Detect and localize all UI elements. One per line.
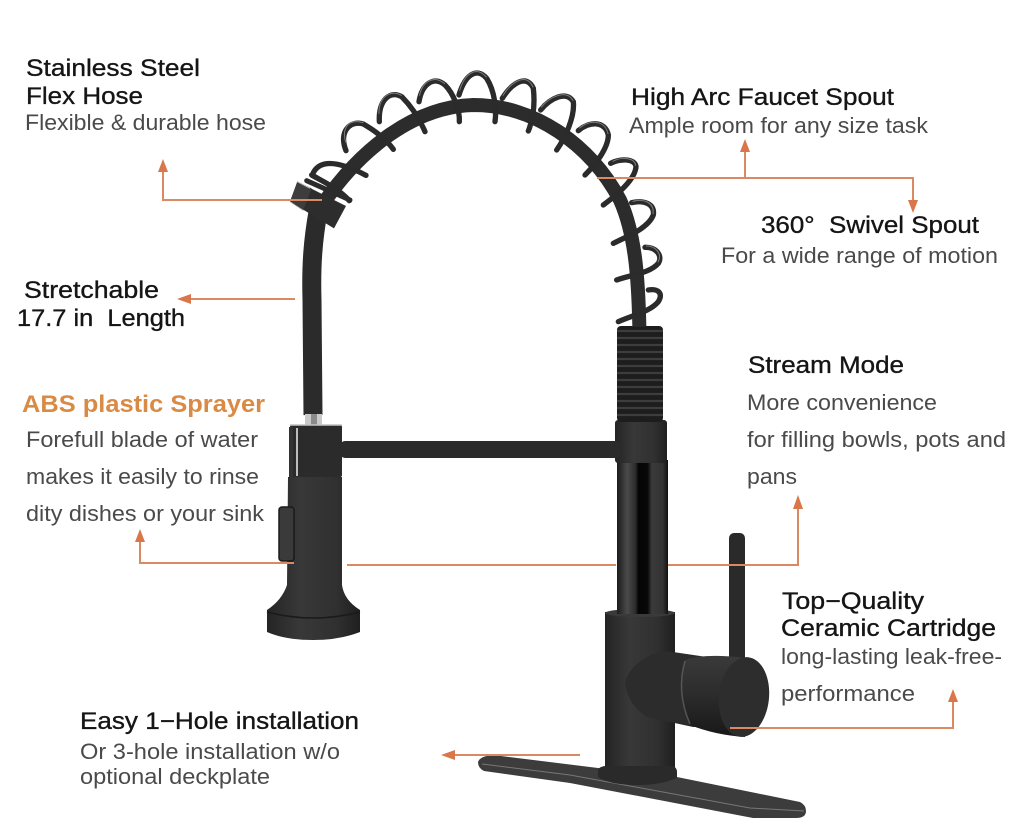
faucet illustration <box>267 72 806 818</box>
arrow: sprayer <box>135 529 294 563</box>
callout: stream mode: pans <box>747 464 797 489</box>
arrow: ceramic cartridge <box>730 689 958 728</box>
callout: easy installation <box>80 708 359 789</box>
callout: high arc faucet spout: High Arc Faucet Spout <box>631 84 894 111</box>
callout: stream mode: Stream Mode <box>748 352 904 379</box>
callout: stream mode: More convenience <box>747 390 937 415</box>
callout: ABS plastic sprayer: ABS plastic Sprayer <box>22 391 265 418</box>
callout: ABS plastic sprayer: makes it easily to rinse <box>26 464 259 489</box>
sprayer button <box>279 507 294 561</box>
arrow: flex hose <box>158 159 322 200</box>
callout: easy installation: Easy 1−Hole installation <box>80 708 359 735</box>
callout: swivel spout: 360° Swivel Spout <box>761 212 979 239</box>
deck plate <box>478 755 806 818</box>
callout: high arc faucet spout <box>629 84 929 138</box>
callout: stainless steel flex hose: Flex Hose <box>26 83 143 110</box>
callout: stainless steel flex hose: Stainless Steel <box>26 55 200 82</box>
ceramic cartridge <box>625 652 773 739</box>
callout: swivel spout <box>721 212 998 268</box>
hose collar <box>290 181 350 228</box>
spring sleeve and collar <box>615 326 667 463</box>
callout: stainless steel flex hose <box>25 55 266 135</box>
callout: stretchable length <box>17 277 185 332</box>
callout: high arc faucet spout: Ample room for any size task <box>629 113 929 138</box>
arrow: stream mode <box>347 495 803 565</box>
callout: ABS plastic sprayer: Forefull blade of water <box>26 427 258 452</box>
faucet body <box>598 609 677 785</box>
pull-down sprayer <box>267 414 360 640</box>
callout: easy installation: optional deckplate <box>80 764 270 789</box>
callout: stream mode: for filling bowls, pots and <box>747 427 1006 452</box>
callout: stretchable length: Stretchable <box>24 277 159 304</box>
callout: stainless steel flex hose: Flexible & durable hose <box>25 110 266 135</box>
callout: stream mode <box>747 352 1006 489</box>
callout: ceramic cartridge: Top−Quality <box>782 588 924 615</box>
lower spout tube <box>617 460 668 614</box>
callout: ABS plastic sprayer <box>22 391 265 526</box>
callout: ceramic cartridge: performance <box>781 681 915 706</box>
arrow: stretchable <box>177 294 295 304</box>
handle lever <box>729 533 745 663</box>
coil highlights <box>345 72 660 262</box>
callout: swivel spout: For a wide range of motion <box>721 243 998 268</box>
arrow: installation <box>441 750 580 760</box>
callout: stretchable length: 17.7 in Length <box>17 305 185 332</box>
callout: ceramic cartridge: long-lasting leak-free- <box>781 644 1002 669</box>
arrow: arc spout and swivel <box>597 139 918 213</box>
callout: ABS plastic sprayer: dity dishes or your sink <box>26 501 265 526</box>
callout: ceramic cartridge: Ceramic Cartridge <box>781 615 996 642</box>
flexible hose <box>312 212 318 415</box>
arched spout with coil <box>290 72 660 327</box>
callout: easy installation: Or 3-hole installation w/o <box>80 739 340 764</box>
horizontal support bar <box>340 441 621 458</box>
callout: ceramic cartridge <box>781 588 1002 706</box>
